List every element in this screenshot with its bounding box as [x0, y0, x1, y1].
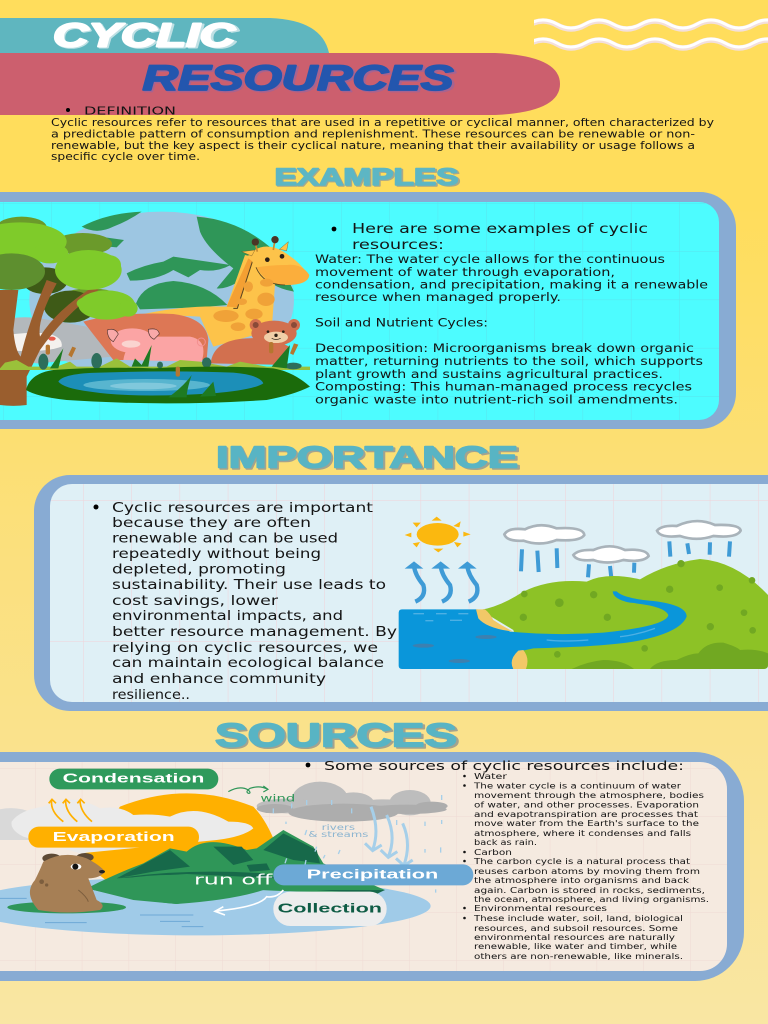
importance text: resilience.. — [112, 687, 190, 703]
evaporation arrows — [49, 799, 92, 822]
water: back as rain. — [474, 838, 537, 847]
body lines: movement of water through evaporation, — [315, 266, 615, 279]
label: condensation: Condensation — [63, 771, 204, 786]
illustration: water cycle — [399, 517, 768, 669]
carbon: again. Carbon is stored in rocks, sediments, — [474, 886, 705, 895]
red banner — [0, 53, 560, 115]
water: atmosphere, where it condenses and falls — [474, 829, 691, 838]
definition label: DEFINITION — [84, 104, 176, 118]
back cloud — [0, 808, 28, 840]
environmental resources: renewable, like water and timber, while — [474, 942, 677, 951]
importance text: Cyclic resources are important — [112, 500, 373, 516]
pig — [107, 328, 205, 362]
label: collection — [273, 892, 387, 926]
label: rivers and streams: & streams — [308, 830, 368, 839]
importance text: relying on cyclic resources, we — [112, 640, 378, 656]
cow — [83, 314, 208, 360]
importance text: environmental impacts, and — [112, 608, 343, 624]
label: evaporation — [28, 827, 199, 848]
sun — [405, 517, 471, 552]
title banner — [0, 16, 560, 115]
heading: sources — [215, 716, 460, 755]
small raindrops — [273, 795, 442, 893]
intro line — [352, 222, 648, 253]
heading: sources: SOURCES — [216, 718, 460, 755]
sources list — [463, 772, 709, 961]
heading: importance — [216, 440, 520, 476]
heading: examples: EXAMPLES — [274, 164, 458, 191]
decorative waves — [529, 20, 768, 48]
illustration: water cycle with bear — [0, 769, 473, 935]
label: wind: wind — [260, 794, 295, 805]
label: rivers and streams — [309, 824, 368, 837]
environmental resources: environmental resources are naturally — [474, 933, 676, 942]
bear — [30, 853, 105, 912]
water: move water from the Earth's surface to the — [474, 819, 699, 828]
rhino — [13, 317, 111, 364]
definition text: renewable, but the key aspect is their cyclical nature, meaning that their availability or usage follows a — [51, 140, 695, 152]
water: The water cycle is a continuum of water — [473, 782, 682, 790]
definition text: Cyclic resources refer to resources that are used in a repetitive or cyclical manner, often characterized by — [51, 117, 714, 129]
body lines: matter, returning nutrients to the soil, which supports — [315, 355, 703, 368]
panel: sources — [0, 752, 744, 981]
importance text: sustainability. Their use leads to — [112, 577, 386, 593]
importance text: because they are often — [112, 515, 311, 531]
title: RESOURCES — [142, 59, 456, 100]
bullet — [306, 763, 310, 767]
importance text: depleted, promoting — [112, 562, 286, 578]
run-off arrow — [215, 890, 283, 915]
environmental resources: resources, and subsoil resources. Some — [474, 924, 678, 933]
importance text: renewable and can be used — [112, 530, 338, 546]
environmental resources — [473, 904, 683, 961]
list bullets — [463, 775, 466, 919]
bullet — [332, 227, 336, 231]
title: RESOURCES: RESOURCES — [144, 60, 456, 100]
environmental resources: These include water, soil, land, biological — [473, 914, 683, 923]
water: Water — [474, 772, 508, 781]
water: of water, and other processes. Evaporation — [474, 800, 699, 809]
grass — [0, 343, 310, 370]
body lines: organic waste into nutrient-rich soil amendments. — [315, 394, 678, 406]
intro line: resources: — [352, 238, 444, 253]
label: collection: Collection — [278, 900, 382, 915]
label: run off: run off — [194, 872, 273, 888]
body lines: Water: The water cycle allows for the continuous — [315, 253, 665, 266]
examples text — [315, 222, 708, 406]
definition text: specific cycle over time. — [51, 151, 200, 163]
grey storm cloud — [257, 782, 448, 822]
definition block — [51, 104, 714, 163]
heading: importance: IMPORTANCE — [216, 440, 518, 474]
body lines: Decomposition: Microorganisms break down organic — [315, 342, 694, 355]
importance text: cost savings, lower — [112, 593, 279, 609]
carbon — [473, 848, 709, 904]
label: condensation — [49, 769, 218, 789]
carbon: the ocean, atmosphere, and living organisms. — [474, 895, 709, 904]
globe — [29, 212, 294, 367]
panel: examples — [0, 192, 736, 429]
body lines: resource when managed properly. — [315, 291, 561, 304]
evaporation arrows — [405, 561, 477, 602]
wind arrow — [228, 786, 268, 793]
label: rivers and streams: rivers — [322, 823, 355, 832]
title: CYCLIC: CYCLIC — [53, 16, 237, 54]
bullet — [94, 504, 98, 510]
lake — [0, 877, 431, 935]
heading: examples — [274, 164, 460, 192]
sources intro — [306, 758, 684, 773]
rain arrows — [365, 807, 413, 866]
panel: importance — [34, 475, 768, 711]
bear — [211, 319, 300, 365]
giraffe — [143, 236, 309, 347]
front cloud — [11, 800, 253, 853]
carbon: reuses carbon atoms by moving them from — [474, 867, 700, 876]
teal banner — [0, 18, 329, 53]
pond — [26, 342, 310, 403]
body lines: Composting: This human-managed process recycles — [315, 380, 692, 394]
carbon: Carbon — [474, 848, 512, 857]
label: precipitation: Precipitation — [307, 867, 438, 882]
heading: examples: EXAMPLES — [276, 165, 460, 192]
water: and evapotranspiration are processes that — [474, 810, 698, 819]
title: CYCLIC: CYCLIC — [54, 18, 240, 54]
water details — [413, 614, 655, 641]
sun — [80, 793, 277, 883]
clouds — [504, 521, 741, 562]
lake ripples — [0, 898, 203, 927]
carbon: The carbon cycle is a natural process that — [473, 857, 690, 866]
label: precipitation — [273, 864, 473, 885]
mountains — [87, 830, 385, 904]
heading: sources: SOURCES — [215, 716, 457, 754]
sources intro: Some sources of cyclic resources include: — [324, 758, 684, 773]
body lines — [315, 253, 708, 406]
bullet — [66, 108, 70, 112]
body lines: plant growth and sustains agricultural practices. — [315, 368, 663, 381]
sea and river — [399, 591, 687, 669]
hills — [480, 559, 768, 669]
intro line: Here are some examples of cyclic — [352, 222, 648, 237]
title: RESOURCES: RESOURCES — [142, 59, 454, 98]
environmental resources: Environmental resources — [474, 904, 607, 913]
lily pad — [7, 901, 126, 913]
body lines: condensation, and precipitation, making it a renewable — [315, 278, 708, 292]
importance text — [112, 500, 397, 703]
tree — [0, 217, 138, 406]
rain — [521, 541, 730, 578]
importance text: repeatedly without being — [112, 546, 321, 562]
title: CYCLIC — [53, 16, 240, 54]
importance text: better resource management. By — [112, 624, 397, 640]
definition text: a predictable pattern of consumption and replenishment. These resources can be renewable or non- — [51, 128, 695, 140]
illustration: earth and animals — [0, 212, 310, 406]
body lines: Soil and Nutrient Cycles: — [315, 316, 488, 330]
water — [473, 772, 704, 847]
environmental resources: others are non-renewable, like minerals. — [474, 952, 683, 961]
definition text — [51, 117, 714, 163]
heading: importance: IMPORTANCE — [218, 441, 520, 476]
beach — [476, 609, 527, 669]
importance text: can maintain ecological balance — [112, 655, 384, 671]
importance text: and enhance community — [112, 671, 326, 687]
label: evaporation: Evaporation — [53, 829, 175, 844]
carbon: the atmosphere into organisms and back — [474, 876, 690, 885]
water: movement through the atmosphere, bodies — [474, 791, 704, 800]
